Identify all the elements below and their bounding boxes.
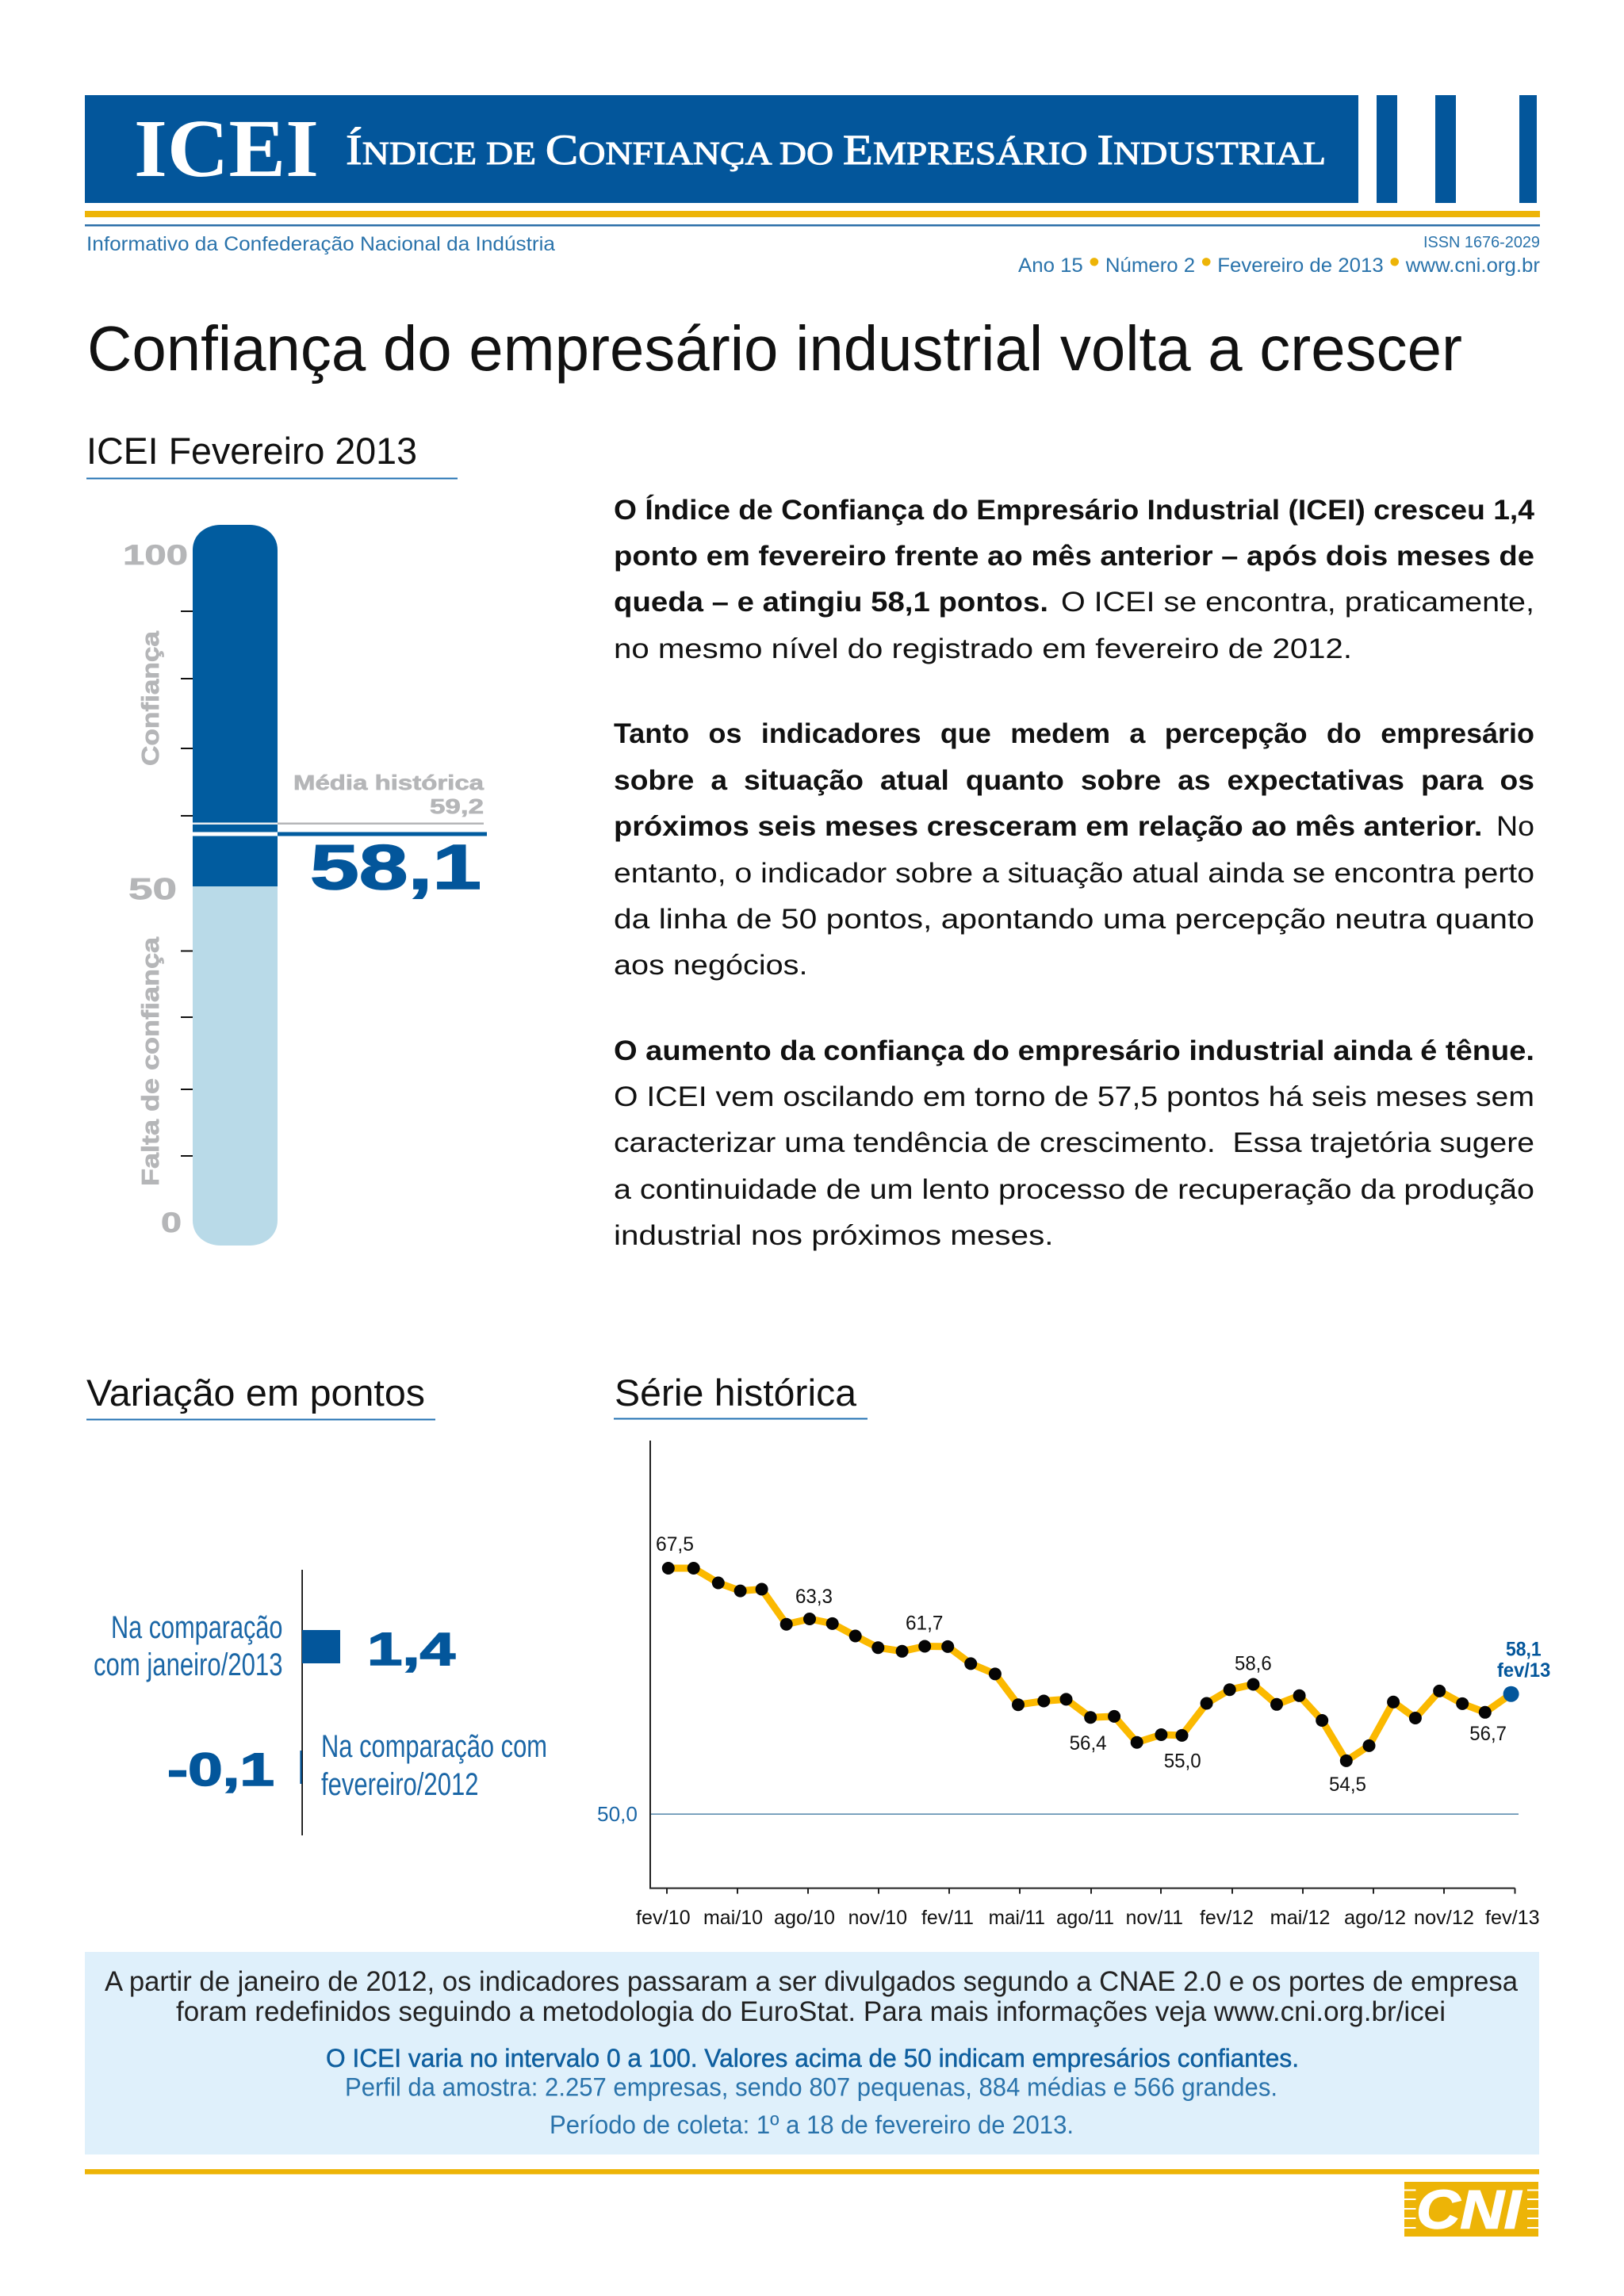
heading: Série histórica: Série histórica: [615, 1372, 857, 1414]
value labels: 61,7: [906, 1613, 943, 1635]
x axis labels: ago/11: [1056, 1907, 1114, 1929]
x axis labels: [636, 1907, 1540, 1929]
paragraph 2: sobre a situação atual quanto sobre as expectativas para os: [614, 765, 1534, 796]
survey details: Período de coleta: 1º a 18 de fevereiro de 2013.: [550, 2110, 1074, 2139]
x axis labels: nov/10: [848, 1907, 907, 1929]
x axis labels: fev/10: [636, 1907, 691, 1929]
confidence bar: [193, 525, 278, 886]
publication info: Ano 15 • Número 2 • Fevereiro de 2013 • www.cni.org.br: [1018, 246, 1540, 279]
bar: february comparison: -0,1: [167, 1744, 274, 1796]
survey details: O ICEI varia no intervalo 0 a 100. Valores acima de 50 indicam empresários confiantes.: [326, 2044, 1299, 2072]
thermometer gauge: Falta de confiança: [136, 936, 164, 1186]
methodology note: [105, 1966, 1519, 2027]
current value: 58,1: [310, 832, 481, 902]
paragraph 2: Tanto os indicadores que medem a percepção do empresário: [614, 718, 1534, 749]
publication info: [86, 233, 1540, 279]
header banner: ICEI: [134, 103, 319, 194]
paragraph 1: queda – e atingiu 58,1 pontos.: [614, 587, 1048, 618]
header banner: [85, 95, 1537, 203]
footer rule: [85, 2169, 1539, 2174]
paragraph 1: ponto em fevereiro frente ao mês anterior – após dois meses de: [614, 541, 1534, 572]
value labels: 55,0: [1164, 1751, 1201, 1773]
bar: february comparison: Na comparação com: [321, 1729, 547, 1764]
methodology panel: [85, 1952, 1539, 2155]
x axis labels: fev/11: [921, 1907, 974, 1929]
paragraph 2: da linha de 50 pontos, apontando uma percepção neutra quanto: [614, 904, 1534, 935]
bar: january comparison: Na comparação: [111, 1610, 282, 1645]
paragraph 1: [614, 494, 1535, 664]
header rules: [85, 211, 1540, 227]
x axis labels: nov/11: [1126, 1907, 1183, 1929]
x axis labels: ago/12: [1344, 1907, 1406, 1929]
thermometer gauge: 59,2: [430, 794, 484, 818]
x axis labels: ago/10: [774, 1907, 835, 1929]
bar: february comparison: fevereiro/2012: [321, 1767, 479, 1802]
bar: february comparison: [167, 1729, 547, 1802]
paragraph 2: aos negócios.: [614, 950, 807, 981]
paragraph 2: [614, 718, 1534, 981]
publication info: Informativo da Confederação Nacional da Indústria: [86, 233, 555, 255]
historic average and current lines: [193, 823, 278, 825]
tick marks: [181, 611, 200, 1156]
x axis labels: fev/12: [1200, 1907, 1254, 1929]
paragraph 2: próximos seis meses cresceram em relação ao mês anterior.: [614, 811, 1483, 842]
heading: Variação em pontos: Variação em pontos: [86, 1372, 425, 1414]
x axis labels: mai/10: [703, 1907, 763, 1929]
thermometer gauge: [123, 525, 487, 1246]
paragraph 3: industrial nos próximos meses.: [614, 1220, 1053, 1251]
paragraph 3: O ICEI vem oscilando em torno de 57,5 pontos há seis meses sem: [614, 1081, 1534, 1112]
x axis labels: mai/11: [989, 1907, 1045, 1929]
title: Confiança do empresário industrial volta a crescer: [87, 313, 1462, 384]
paragraph 2: entanto, o indicador sobre a situação atual ainda se encontra perto: [614, 858, 1534, 889]
survey details: [326, 2044, 1299, 2139]
value labels: 56,7: [1469, 1723, 1507, 1745]
value labels: 54,5: [1329, 1774, 1366, 1796]
value labels: 58,6: [1235, 1652, 1272, 1674]
value labels: 63,3: [795, 1586, 833, 1608]
methodology note: foram redefinidos seguindo a metodologia do EuroStat. Para mais informações veja www.cni.org.br/icei: [176, 1996, 1446, 2027]
bar: january comparison: com janeiro/2013: [94, 1647, 282, 1682]
paragraph 3: caracterizar uma tendência de crescimento. Essa trajetória sugere: [614, 1127, 1534, 1158]
thermometer gauge: 50: [128, 873, 177, 906]
x axis labels: nov/12: [1414, 1907, 1474, 1929]
variation bar chart: [94, 1570, 547, 1835]
value labels: fev/13: [1497, 1659, 1550, 1682]
value labels: 56,4: [1070, 1732, 1107, 1755]
value labels: [656, 1533, 1550, 1796]
thermometer gauge: 0: [161, 1207, 182, 1238]
publication info: ISSN 1676-2029: [1423, 234, 1540, 251]
paragraph 3: [614, 1035, 1534, 1251]
value labels: 58,1: [1506, 1638, 1542, 1660]
value labels: 67,5: [656, 1533, 694, 1556]
bar: january comparison: 1,4: [367, 1624, 455, 1675]
survey details: Perfil da amostra: 2.257 empresas, sendo 807 pequenas, 884 médias e 566 grandes.: [345, 2072, 1277, 2101]
header banner: ÍNDICE DE CONFIANÇA DO EMPRESÁRIO INDUSTRIAL: [346, 126, 1326, 174]
lack of confidence bar: [193, 886, 278, 1246]
bar: january comparison: [94, 1610, 455, 1682]
data points: [662, 1562, 1492, 1767]
x axis labels: fev/13: [1485, 1907, 1540, 1929]
methodology note: A partir de janeiro de 2012, os indicadores passaram a ser divulgados segundo a CNAE 2.0 e os portes de empresa: [105, 1966, 1519, 1997]
reference line 50: 50,0: [597, 1802, 638, 1826]
paragraph 2: No: [1496, 811, 1534, 842]
paragraph 1: O ICEI se encontra, praticamente,: [1061, 587, 1534, 618]
historic average label: Média histórica: [293, 771, 485, 794]
heading: ICEI Fevereiro 2013: ICEI Fevereiro 2013: [86, 430, 417, 472]
paragraph 3: a continuidade de um lento processo de recuperação da produção: [614, 1174, 1534, 1205]
paragraph 1: no mesmo nível do registrado em fevereiro de 2012.: [614, 633, 1352, 664]
paragraph 1: O Índice de Confiança do Empresário Industrial (ICEI) cresceu 1,4: [614, 494, 1535, 526]
line chart: historical series: [597, 1441, 1550, 1929]
x axis labels: mai/12: [1270, 1907, 1331, 1929]
data line: [668, 1568, 1511, 1761]
thermometer gauge: Confiança: [136, 630, 164, 766]
paragraph 3: O aumento da confiança do empresário industrial ainda é tênue.: [614, 1035, 1534, 1066]
scale labels: 100: [123, 540, 188, 571]
axes: [650, 1441, 1515, 1894]
latest data point: [1503, 1686, 1519, 1702]
icon: CNI logo: CNI: [1416, 2179, 1522, 2241]
